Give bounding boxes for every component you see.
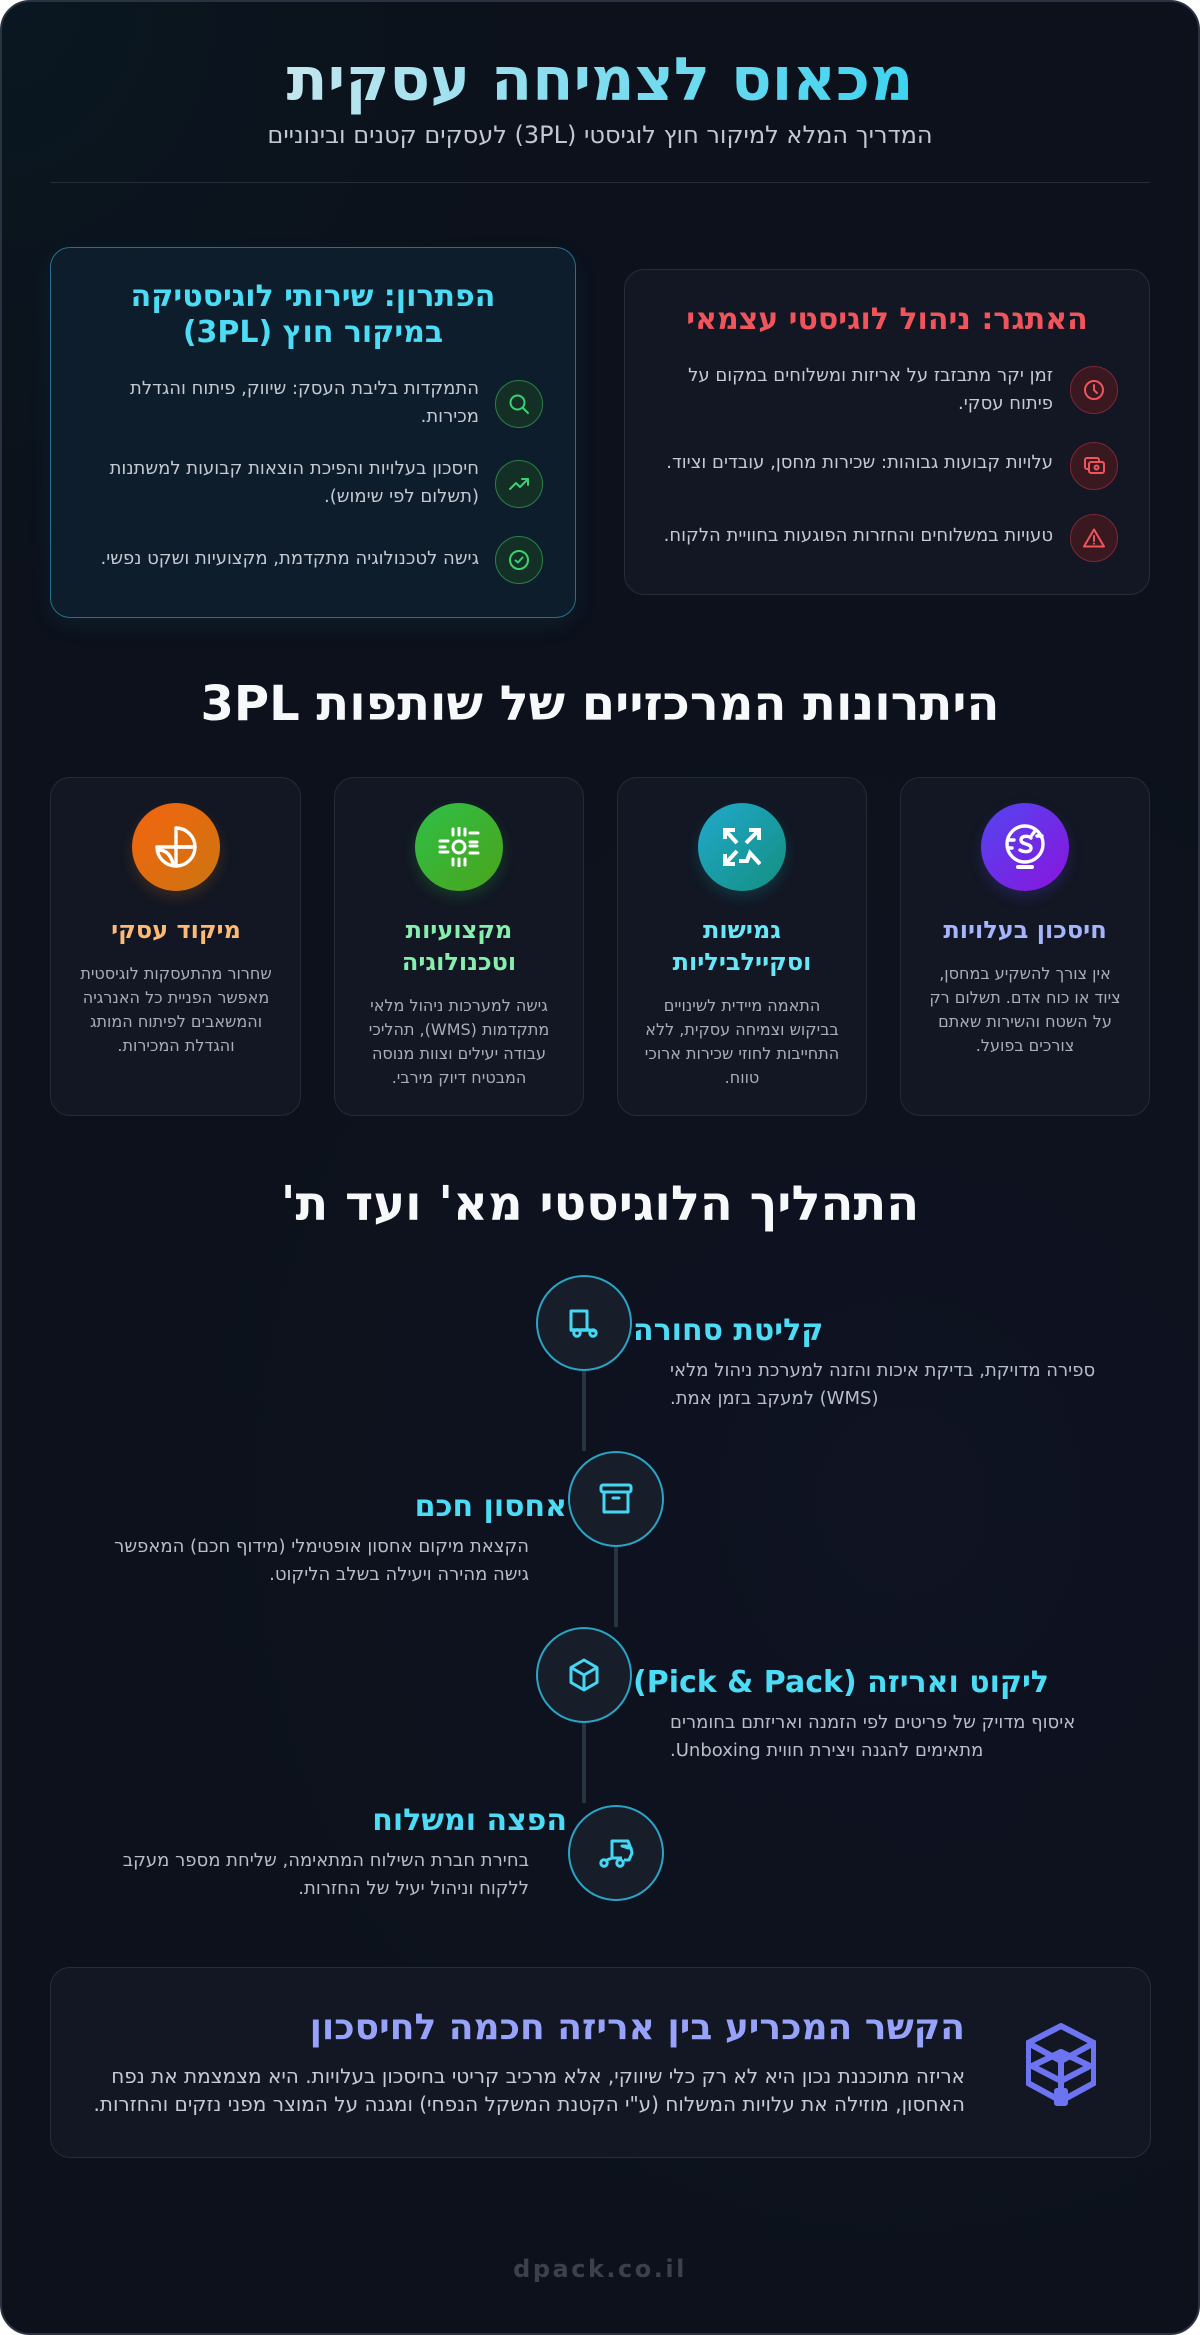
challenge item 2 text: עלויות קבועות גבוהות: שכירות מחסן, עובדים וציוד. xyxy=(666,452,1053,473)
card text: professionalism: גישה למערכות ניהול מלאי xyxy=(370,996,548,1015)
challenge item 1 text: זמן יקר מתבזבז על אריזות ומשלוחים במקום על xyxy=(688,365,1053,386)
icon: savings xyxy=(981,802,1069,890)
step text: delivery xyxy=(123,1850,529,1899)
step icon: pick and pack xyxy=(536,1627,632,1723)
card text: focus: והמשאבים לפיתוח המותג xyxy=(90,1012,262,1031)
insight text: אריזה מתוכננת נכון היא לא רק כלי שיווקי, אלא מרכיב קריטי בחיסכון בעלויות. היא מצמצמת את נפח xyxy=(111,2064,965,2088)
card title: focus: מיקוד עסקי xyxy=(111,916,241,944)
step icon: receiving xyxy=(536,1275,632,1371)
connector line 2 xyxy=(614,1547,618,1627)
challenge item 1 text: פיתוח עסקי. xyxy=(958,393,1053,414)
header divider xyxy=(50,182,1150,183)
step title: storage: אחסון חכם xyxy=(415,1489,567,1524)
step text: pick and pack: איסוף מדויק של פריטים לפי הזמנה ואריזתם בחומרים xyxy=(670,1712,1075,1733)
card text: professionalism: עבודה יעילים וצוות מנוסה xyxy=(372,1044,546,1063)
step icon: storage xyxy=(568,1451,664,1547)
card: focus xyxy=(50,777,300,1116)
card text: savings xyxy=(929,964,1121,1055)
footer brand: dpack.co.il xyxy=(513,2255,687,2283)
card title: professionalism: וטכנולוגיה xyxy=(402,948,516,976)
card text: professionalism: המבטיח דיוק מירבי. xyxy=(392,1068,526,1087)
panel: packaging insight xyxy=(50,1967,1151,2158)
insight text xyxy=(93,2064,965,2116)
card title: professionalism: מקצועיות xyxy=(406,916,512,944)
step text: pick and pack: מתאימים להגנה ויצירת חווית Unboxing. xyxy=(670,1740,983,1761)
card text: savings: ציוד או כוח אדם. תשלום רק xyxy=(929,988,1121,1007)
step title: delivery: הפצה ומשלוח xyxy=(372,1803,567,1838)
card text: professionalism: מתקדמות (WMS), תהליכי xyxy=(369,1020,549,1039)
step text: delivery: בחירת חברת השילוח המתאימה, שליחת מספר מעקב xyxy=(123,1850,529,1871)
icon: package xyxy=(1026,2023,1096,2106)
icon: chip xyxy=(415,802,503,890)
card text: flexibility xyxy=(645,996,839,1087)
card text: savings: צורכים בפועל. xyxy=(976,1036,1074,1055)
card title: flexibility xyxy=(672,916,811,976)
solution heading: הפתרון: שירותי לוגיסטיקה xyxy=(131,279,495,314)
icon: expand arrows xyxy=(698,802,786,890)
heading: advantages: היתרונות המרכזיים של שותפות 3PL xyxy=(201,676,999,732)
solution item 1 text: מכירות. xyxy=(421,406,479,427)
title: מכאוס לצמיחה עסקית xyxy=(287,45,913,115)
solution heading xyxy=(131,279,495,350)
card title: professionalism xyxy=(402,916,516,976)
step text: pick and pack xyxy=(670,1712,1075,1761)
heading: process: התהליך הלוגיסטי מא' ועד ת' xyxy=(281,1176,919,1232)
card: professionalism xyxy=(334,777,584,1116)
icon: clock xyxy=(1070,366,1118,414)
card text: flexibility: בביקוש וצמיחה עסקית, ללא xyxy=(645,1020,839,1039)
step text: storage xyxy=(114,1536,529,1585)
card text: focus: שחרור מהתעסקות לוגיסטית xyxy=(80,964,272,983)
card title: flexibility: גמישות xyxy=(703,916,781,944)
step text: receiving xyxy=(670,1360,1095,1409)
subtitle: המדריך המלא למיקור חוץ לוגיסטי (3PL) לעסקים קטנים ובינוניים xyxy=(267,121,933,149)
solution item 3 text: גישה לטכנולוגיה מתקדמת, מקצועיות ושקט נפשי. xyxy=(100,548,479,569)
icon: trending up xyxy=(495,460,543,508)
connector line 3 xyxy=(582,1723,586,1803)
solution heading: במיקור חוץ (3PL) xyxy=(183,315,443,350)
card text: focus: מאפשר הפניית כל האנרגיה xyxy=(83,988,269,1007)
card text: flexibility: התחייבות לחוזי שכירות ארוכי xyxy=(645,1044,839,1063)
challenge item 3 text: טעויות במשלוחים והחזרות הפוגעות בחוויית הלקוח. xyxy=(664,525,1053,546)
solution item 2 text xyxy=(110,458,479,507)
insight text: האחסון, מוזילה את עלויות המשלוח (ע"י הקטנת המשקל הנפחי) ומגנה על המוצר מפני נזקים והחזרות. xyxy=(93,2092,965,2116)
step title: receiving: קליטת סחורה xyxy=(633,1313,823,1348)
card title: flexibility: וסקיילביליות xyxy=(673,948,811,976)
card text: focus: והגדלת המכירות. xyxy=(117,1036,235,1055)
panel: challenge xyxy=(624,269,1150,595)
card text: flexibility: טווח. xyxy=(725,1068,759,1087)
card text: savings: אין צורך להשקיע במחסן, xyxy=(939,964,1111,983)
card text: focus xyxy=(80,964,272,1055)
step text: receiving: ספירה מדויקת, בדיקת איכות והזנה למערכת ניהול מלאי xyxy=(670,1360,1095,1381)
card text: savings: על השטח והשירות שאתם xyxy=(938,1012,1112,1031)
step text: storage: גישה מהירה ויעילה בשלב הליקוט. xyxy=(269,1564,529,1585)
card title: savings: חיסכון בעלויות xyxy=(943,916,1107,944)
card: savings xyxy=(900,777,1150,1116)
icon: pie chart xyxy=(132,802,220,890)
icon: money xyxy=(1070,442,1118,490)
challenge heading: האתגר: ניהול לוגיסטי עצמאי xyxy=(686,302,1088,337)
step text: delivery: ללקוח וניהול יעיל של החזרות. xyxy=(298,1878,529,1899)
step text: storage: הקצאת מיקום אחסון אופטימלי (מידוף חכם) המאפשר xyxy=(114,1536,529,1557)
icon: check circle xyxy=(495,536,543,584)
challenge item 1 text xyxy=(688,365,1053,414)
card text: flexibility: התאמה מיידית לשינויים xyxy=(664,996,820,1015)
step icon: delivery xyxy=(568,1805,664,1901)
step title: pick and pack: ליקוט ואריזה (Pick & Pack) xyxy=(633,1665,1049,1700)
solution item 2 text: חיסכון בעלויות והפיכת הוצאות קבועות למשתנות xyxy=(110,458,479,479)
icon: warning xyxy=(1070,514,1118,562)
solution item 1 text xyxy=(130,378,479,427)
card: flexibility xyxy=(616,777,867,1116)
solution item 2 text: (תשלום לפי שימוש). xyxy=(324,486,479,507)
step text: receiving: (WMS) למעקב בזמן אמת. xyxy=(670,1388,878,1409)
icon: search xyxy=(495,380,543,428)
connector line 1 xyxy=(582,1371,586,1451)
insight heading: הקשר המכריע בין אריזה חכמה לחיסכון xyxy=(310,2007,965,2048)
solution item 1 text: התמקדות בליבת העסק: שיווק, פיתוח והגדלת xyxy=(130,378,479,399)
card text: professionalism xyxy=(369,996,549,1087)
panel: solution xyxy=(50,247,576,618)
